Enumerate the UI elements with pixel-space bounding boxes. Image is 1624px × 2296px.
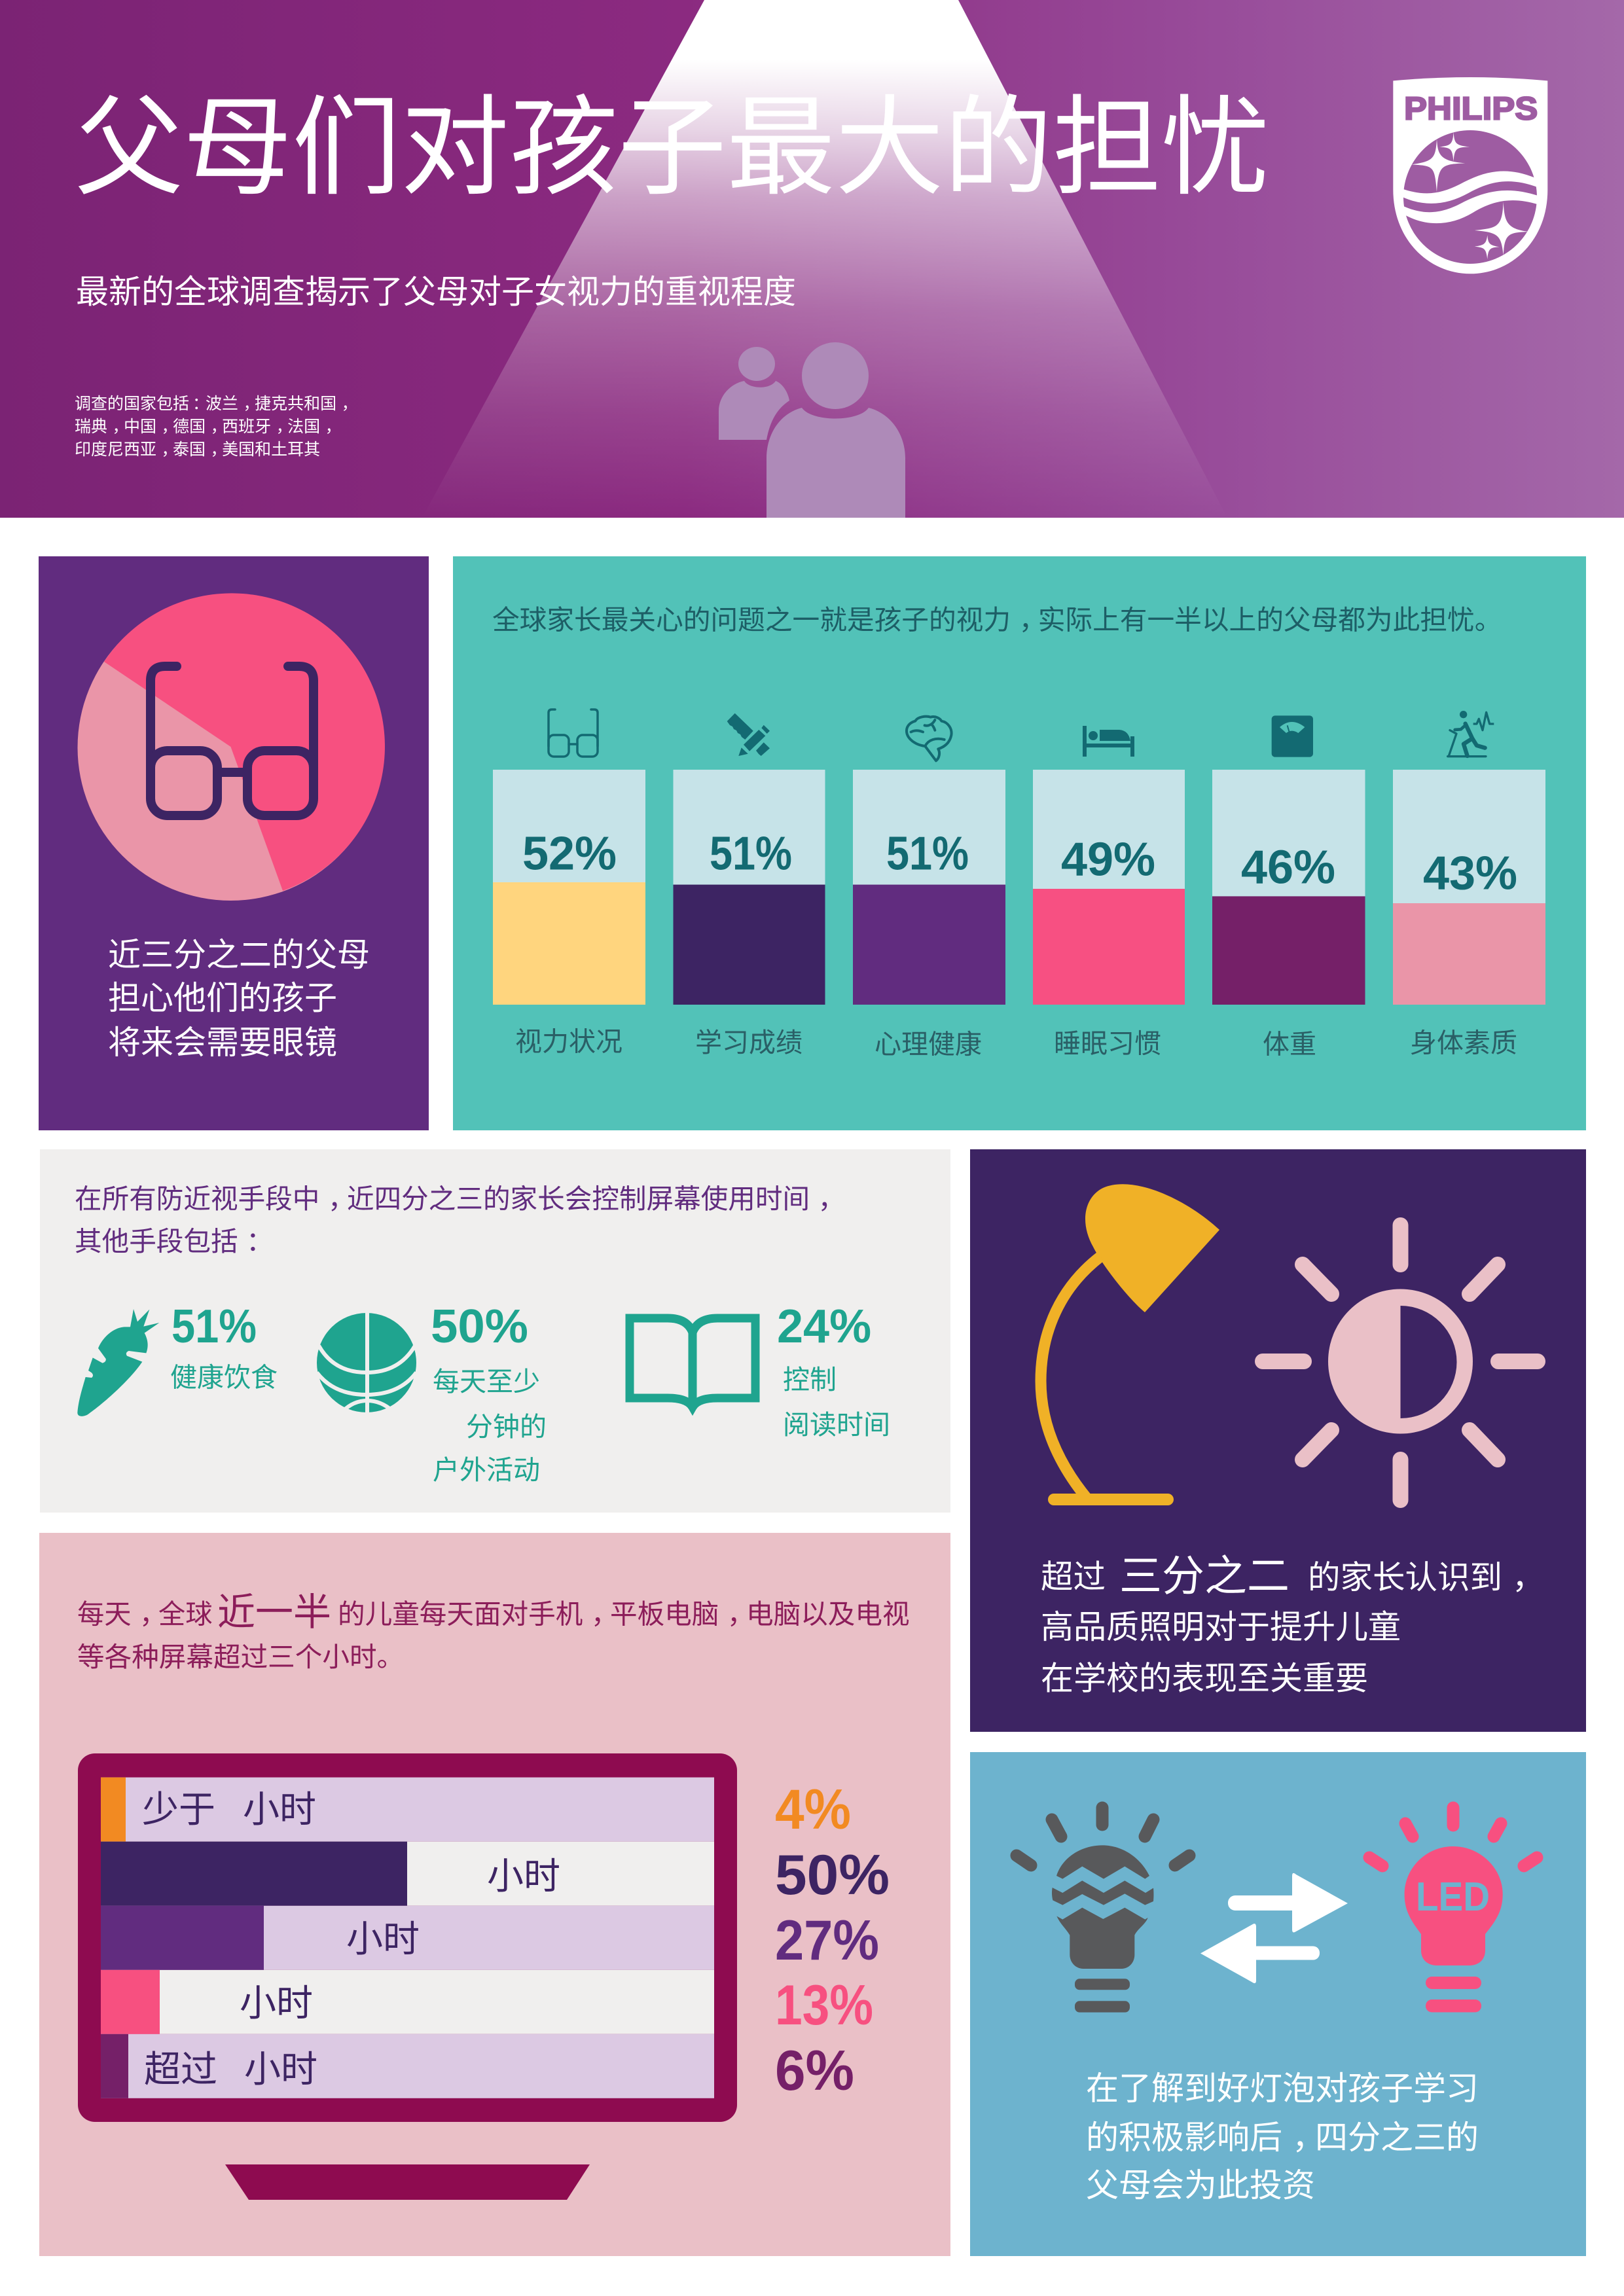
bar chart: daily screen hours — [101, 1778, 714, 2098]
bar chart: concerns: 49% — [1061, 834, 1155, 886]
bar chart: concerns: 身体素质 — [1410, 1028, 1517, 1058]
text: three quarters invest: 父母会为此投资 — [1086, 2167, 1315, 2204]
bar chart: daily screen hours: 少于 — [142, 1789, 215, 1830]
text: lighting awareness: 高品质照明对于提升儿童 — [1041, 1609, 1401, 1645]
intro text: 的儿童每天面对手机 ，平板电脑 ，电脑以及电视 — [338, 1599, 910, 1630]
icon: glasses — [151, 666, 314, 816]
bar chart: daily screen hours: 小时 — [240, 1982, 313, 2024]
intro text: 每天 ，全球 — [77, 1600, 213, 1630]
bar chart: concerns: 46% — [1241, 842, 1335, 894]
bar chart: concerns: 视力状况 — [515, 1027, 623, 1057]
icon: ruler and pencil — [727, 713, 770, 756]
text: 50% outdoor activity: 分钟的 — [466, 1412, 547, 1442]
intro text — [75, 1183, 845, 1257]
icon: Philips shield logo — [1393, 77, 1547, 274]
bar chart: daily screen hours: 超过 — [144, 2049, 217, 2090]
text: 24% limit reading time — [777, 1300, 890, 1440]
text: lighting awareness: 超过 — [1041, 1559, 1106, 1595]
spotlight beam — [422, 0, 1227, 518]
text: two thirds of parents: 担心他们的孩子 — [108, 980, 337, 1016]
percentages: 27% — [775, 1909, 879, 1972]
text: three quarters invest: 的积极影响后 ，四分之三的 — [1086, 2119, 1479, 2156]
text: surveyed countries — [75, 395, 358, 459]
text: two thirds of parents — [108, 937, 370, 1061]
icon: desk lamp — [1041, 1184, 1219, 1505]
panel: header banner — [0, 0, 1624, 518]
bar chart: concerns — [493, 770, 1545, 1060]
text: 50% outdoor activity: 每天至少 — [433, 1367, 540, 1397]
text: three quarters invest — [1086, 2070, 1479, 2204]
icon: parents silhouettes — [719, 342, 905, 518]
text: surveyed countries: 印度尼西亚 ，泰国 ，美国和土耳其 — [75, 440, 320, 459]
text: lighting awareness: 三分之二 — [1119, 1552, 1290, 1600]
icon: Philips shield logo: PHILIPS — [1404, 91, 1538, 127]
panel: lighting and school performance — [970, 1149, 1586, 1732]
text: 24% limit reading time: 24% — [777, 1300, 871, 1353]
icon: pink LED bulb: LED — [1416, 1874, 1490, 1920]
text: 51% healthy diet: 健康饮食 — [170, 1363, 278, 1393]
panel: myopia prevention measures — [40, 1149, 950, 1513]
percentages — [775, 1778, 890, 2102]
bar chart: concerns: 43% — [1423, 847, 1517, 899]
icon: pink LED bulb — [1369, 1808, 1537, 2012]
intro text: 其他手段包括 ： — [75, 1226, 274, 1257]
icon: monitor frame — [78, 1753, 737, 2122]
icon: open book — [630, 1318, 755, 1407]
icon: monitor stand — [225, 2164, 590, 2200]
bar chart: concerns: 体重 — [1263, 1030, 1316, 1060]
bar chart: daily screen hours: 小时 — [346, 1918, 420, 1960]
text: 50% outdoor activity: 50% — [431, 1300, 528, 1353]
text: two thirds of parents: 近三分之二的父母 — [108, 937, 370, 973]
icon: treadmill runner — [1448, 711, 1494, 757]
bar chart: concerns: 51% — [886, 827, 969, 880]
panel: LED bulb investment — [970, 1752, 1586, 2256]
icon: swap arrows — [1200, 1873, 1348, 1983]
text: 24% limit reading time: 控制 — [783, 1365, 837, 1395]
panel: two thirds worry about glasses — [39, 556, 429, 1130]
text: 50% outdoor activity: 户外活动 — [433, 1455, 540, 1485]
pie chart: two thirds — [77, 593, 385, 901]
icon: basketball — [317, 1312, 416, 1414]
intro text: 近一半 — [217, 1591, 331, 1634]
bar chart: daily screen hours: 小时 — [487, 1856, 560, 1897]
icon: grey traditional bulb — [1017, 1808, 1189, 2013]
percentages: 13% — [775, 1974, 873, 2037]
icon: weighing scale — [1272, 715, 1313, 757]
percentages: 4% — [775, 1778, 851, 1841]
text: 51% healthy diet: 51% — [171, 1300, 257, 1353]
text: three quarters invest: 在了解到好灯泡对孩子学习 — [1086, 2070, 1479, 2107]
intro text — [77, 1591, 910, 1672]
icon: bed — [1083, 726, 1134, 757]
text: surveyed countries: 瑞典 ，中国 ，德国 ，西班牙 ，法国 ， — [75, 418, 342, 436]
title: 父母们对孩子最大的担忧 — [75, 88, 1270, 209]
percentages: 50% — [775, 1844, 890, 1907]
text: 24% limit reading time: 阅读时间 — [783, 1410, 890, 1440]
icon: brightness sun — [1263, 1225, 1538, 1500]
icon: carrot — [77, 1309, 159, 1416]
bar chart: concerns: 睡眠习惯 — [1054, 1029, 1161, 1059]
icon: glasses small — [549, 709, 598, 757]
bar chart: daily screen hours: 小时 — [243, 1789, 316, 1830]
bar chart: concerns: 心理健康 — [875, 1030, 982, 1060]
icon: brain — [907, 717, 952, 761]
text: surveyed countries: 调查的国家包括：波兰 ，捷克共和国 ， — [75, 395, 358, 413]
text: lighting awareness: 的家长认识到 ， — [1308, 1560, 1544, 1596]
bar chart: concerns: 52% — [522, 827, 617, 880]
percentages: 6% — [775, 2039, 854, 2102]
panel: top parental concerns — [453, 556, 1586, 1130]
text: 51% healthy diet — [170, 1300, 278, 1393]
intro text: 全球家长最关心的问题之一就是孩子的视力 ，实际上有一半以上的父母都为此担忧。 — [492, 605, 1502, 636]
intro text: 等各种屏幕超过三个小时。 — [77, 1641, 404, 1672]
text: two thirds of parents: 将来会需要眼镜 — [108, 1024, 337, 1061]
text: 50% outdoor activity — [431, 1300, 547, 1485]
text: lighting awareness: 在学校的表现至关重要 — [1041, 1660, 1368, 1696]
intro text: 在所有防近视手段中 ，近四分之三的家长会控制屏幕使用时间 ， — [75, 1183, 845, 1214]
subtitle: 最新的全球调查揭示了父母对子女视力的重视程度 — [76, 274, 796, 310]
bar chart: daily screen hours: 小时 — [244, 2049, 317, 2090]
panel: screen time — [39, 1533, 950, 2256]
bar chart: concerns: 学习成绩 — [695, 1028, 803, 1058]
text: lighting awareness — [1041, 1552, 1544, 1696]
bar chart: concerns: 51% — [710, 827, 792, 880]
